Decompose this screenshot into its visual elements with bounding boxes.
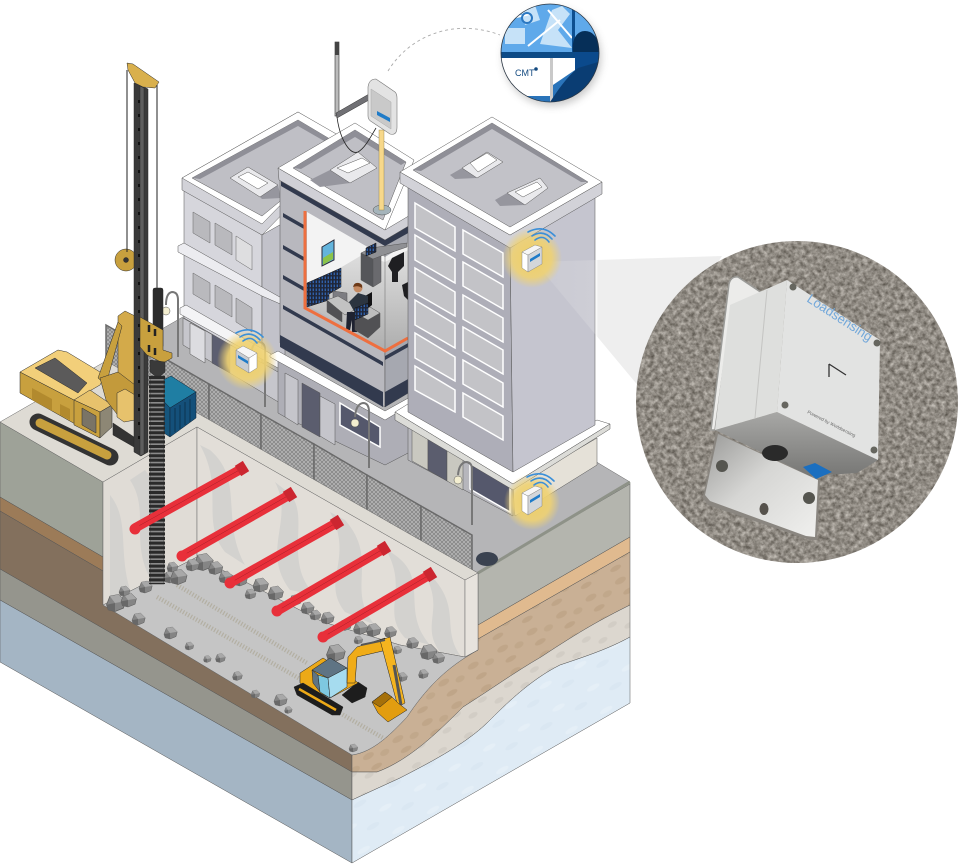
box bottom face <box>715 412 878 476</box>
tower cornice <box>400 172 602 248</box>
carriage slots <box>149 325 155 355</box>
layer: right peach soil <box>478 537 630 639</box>
sensor: tower wall <box>502 228 562 288</box>
screens facing viewer <box>355 303 368 320</box>
left skylight base <box>230 167 278 197</box>
glass corner <box>384 257 386 350</box>
lamp by middle building <box>355 403 369 468</box>
tower front wall <box>408 185 513 472</box>
lower mounting plate rim <box>703 432 820 540</box>
plate hole <box>760 503 768 515</box>
door <box>428 436 447 481</box>
lower mounting plate <box>705 434 818 537</box>
left building roof rim <box>182 112 345 224</box>
picture landscape <box>323 252 333 265</box>
drill motor <box>153 288 163 348</box>
layer: right ice bedrock <box>352 637 630 863</box>
gateway antenna <box>335 42 397 215</box>
cab right glass <box>328 668 347 698</box>
control room screens <box>501 4 596 52</box>
antenna tip <box>335 42 339 55</box>
tower roof <box>413 123 588 227</box>
rig boom strut <box>98 322 122 385</box>
logo glyph on lid <box>829 364 846 377</box>
navy stripes <box>280 178 410 407</box>
wifi signal <box>528 229 555 242</box>
CMT label: CMT <box>515 68 535 78</box>
middle cornice wall <box>278 168 412 240</box>
sensor box <box>522 486 542 515</box>
CMT logo dot <box>534 67 538 71</box>
middle door <box>302 383 320 437</box>
bucket <box>372 692 407 722</box>
lamp globe three <box>454 476 462 484</box>
filing cabinet <box>361 253 373 287</box>
upper windows <box>193 212 252 332</box>
fence panel 7 <box>421 506 472 573</box>
office floor <box>307 250 408 350</box>
floor tracks <box>157 585 383 738</box>
mast holes <box>138 100 140 448</box>
gateway blue stripe <box>377 111 390 122</box>
rig cab side <box>74 400 100 438</box>
strut 3 <box>224 520 341 588</box>
red struts <box>130 466 434 642</box>
Loadsensing label: Loadsensing <box>804 291 875 344</box>
tower skylight one shadow <box>450 168 477 179</box>
left building door <box>212 333 230 373</box>
cylinder <box>394 665 401 705</box>
mast <box>134 83 148 456</box>
container right side <box>170 392 196 437</box>
desk <box>327 300 342 322</box>
middle shop window <box>340 403 380 447</box>
drilling rig <box>20 63 172 584</box>
second chair <box>402 282 408 300</box>
box front face <box>777 280 880 460</box>
white label panel <box>500 58 550 96</box>
fence panel 3 <box>209 384 261 452</box>
track two <box>177 585 307 663</box>
strut 4 <box>272 546 388 616</box>
circle outline <box>501 4 599 102</box>
box lid seam <box>755 290 767 418</box>
plinth <box>395 404 610 484</box>
lamp by rig <box>166 292 178 357</box>
mini excavator <box>294 637 407 722</box>
sensor glow <box>504 474 560 530</box>
middle building <box>270 123 414 465</box>
column two <box>447 447 463 490</box>
concrete background <box>636 241 958 563</box>
wifi signal <box>236 330 263 343</box>
left building ground floor <box>183 318 285 406</box>
middle skylight base <box>330 152 377 183</box>
box side face <box>715 280 787 430</box>
left building <box>178 112 345 406</box>
street lamps <box>162 292 472 525</box>
container corrugation <box>175 399 190 432</box>
navy divider <box>572 10 575 52</box>
antenna arm <box>336 94 369 118</box>
cab left glass <box>318 675 330 698</box>
middle plinth <box>270 351 412 420</box>
mast highlight <box>140 86 144 456</box>
layer: left blue bedrock <box>0 600 352 863</box>
fence <box>106 325 472 573</box>
left building column <box>190 323 205 363</box>
antenna rod <box>335 42 339 116</box>
person torso <box>349 293 368 313</box>
sensor box <box>522 245 542 272</box>
yellow pole <box>379 130 384 210</box>
track one <box>157 597 307 683</box>
ground floor side <box>513 438 597 516</box>
middle ground floor <box>278 352 410 465</box>
layer: left grey-green soil <box>0 422 103 557</box>
powered by label: Powered by Worldsensing <box>807 409 857 438</box>
left building upper ledge <box>178 243 285 306</box>
screw pile shaft <box>150 376 164 584</box>
left building lower ledge <box>180 305 285 368</box>
front desk <box>355 313 380 338</box>
left pit wall <box>103 427 197 605</box>
mast top bracket <box>127 63 159 88</box>
excavator body <box>300 658 358 698</box>
cab roof <box>312 658 347 678</box>
street curb <box>478 482 630 573</box>
layer: left dark brown soil <box>0 511 352 772</box>
ground floor front <box>408 420 513 516</box>
wall right cap <box>465 573 478 657</box>
pole base <box>373 205 391 215</box>
cable <box>337 117 376 152</box>
corner screws <box>782 284 880 454</box>
layer: left tan soil <box>0 497 103 571</box>
fence panel 1 <box>106 325 157 392</box>
middle column <box>285 373 298 425</box>
layer: right grey-green soil <box>478 484 630 625</box>
cabinet screens <box>366 243 376 256</box>
office chair <box>388 252 404 282</box>
middle facade <box>280 178 385 407</box>
person legs <box>346 312 358 332</box>
boom <box>347 638 387 683</box>
light beam to photo <box>535 256 722 388</box>
rig boom block <box>100 372 135 418</box>
rig track outer <box>38 422 110 457</box>
gateway body <box>368 79 397 134</box>
fence panel 2 <box>157 354 209 422</box>
sensor: tower base <box>504 474 560 530</box>
tower skylight two lid <box>515 182 542 197</box>
cable gland <box>762 445 788 461</box>
container top <box>150 376 196 408</box>
middle column two <box>320 396 335 445</box>
screw pile flights <box>149 376 165 584</box>
left slab and wall cap <box>0 361 478 580</box>
left skylight shadow <box>260 185 281 199</box>
rig vents <box>32 388 70 420</box>
cab slate side <box>312 670 320 692</box>
middle skylight shadow <box>310 170 350 187</box>
strut 2 <box>176 492 294 562</box>
tower windows <box>415 203 503 440</box>
layer: left grey rock <box>0 569 352 800</box>
monitoring circle <box>500 0 605 106</box>
lamp by tower <box>458 462 472 525</box>
person chair <box>365 292 372 310</box>
rubble <box>106 554 445 752</box>
fence panel 4 <box>261 414 314 482</box>
sensor box <box>236 346 257 373</box>
white machine drawing <box>512 10 572 46</box>
fence panel 6 <box>367 475 421 544</box>
boom cylinder <box>361 640 385 645</box>
drill bell <box>150 360 165 378</box>
pit walls and slab <box>0 361 478 755</box>
blue lower panel <box>553 70 575 105</box>
rig cab window <box>82 408 96 433</box>
cut-away office <box>305 211 408 351</box>
manhole near corner <box>476 552 498 566</box>
person head <box>354 284 362 292</box>
track three <box>340 713 383 738</box>
lamp globe two <box>351 419 359 427</box>
sensor: left building <box>217 330 277 390</box>
middle side facade <box>385 224 410 407</box>
rig body side <box>20 372 100 438</box>
blue badge <box>803 463 832 479</box>
middle roof rim <box>278 123 414 230</box>
rig body top <box>20 350 105 400</box>
gateway front <box>371 89 391 129</box>
wall swirls <box>110 445 460 655</box>
strut 1 <box>130 466 246 534</box>
blue lower band <box>528 96 550 102</box>
tower skylight one lid <box>470 153 497 172</box>
photo: Loadsensing device <box>636 241 958 563</box>
rig track plate <box>40 423 107 455</box>
operator shoulder <box>550 62 598 102</box>
ground block cross-section <box>0 422 630 863</box>
rear pulley hub <box>124 258 128 262</box>
second panel <box>553 58 575 85</box>
strut 5 <box>318 572 434 642</box>
drill carriage <box>140 317 172 363</box>
upper mounting plate <box>711 277 765 430</box>
cabinet side <box>373 255 381 287</box>
circle shadow <box>503 8 601 106</box>
long desk top <box>361 243 407 259</box>
dashed connection arc <box>388 28 500 71</box>
shipping container <box>150 376 196 437</box>
middle roof parapet <box>293 130 406 169</box>
operator head <box>573 31 600 52</box>
tower skylight one base <box>462 152 503 178</box>
office back wall <box>307 212 408 307</box>
container left side <box>150 387 170 437</box>
column one <box>412 427 428 470</box>
left building roof parapet <box>192 120 345 179</box>
blue right panel <box>575 58 598 70</box>
rear track <box>342 682 367 703</box>
right tower <box>395 117 610 516</box>
bucket inside <box>372 692 392 707</box>
wifi signal <box>527 474 554 487</box>
orange cut line <box>305 211 408 351</box>
manhole near fence <box>228 404 250 416</box>
stick <box>380 637 405 707</box>
tower side wall <box>510 195 595 472</box>
plinth edge <box>395 412 610 490</box>
lamp by left sensor <box>251 342 265 407</box>
sensor glow <box>217 330 277 390</box>
shop windows <box>470 462 510 512</box>
plate screw left <box>716 460 728 472</box>
gear icon <box>522 13 532 23</box>
picture on wall <box>322 240 334 266</box>
street surface <box>106 267 630 573</box>
pit floor <box>103 557 478 755</box>
rig rear track <box>113 423 134 447</box>
back pit wall <box>197 427 465 657</box>
rig cab top <box>74 390 112 412</box>
rig counter block <box>117 389 135 422</box>
plate screw right <box>803 492 815 504</box>
left building roof <box>192 120 345 216</box>
person hair <box>353 283 362 288</box>
fence panel 5 <box>314 444 367 513</box>
rig cab front <box>100 405 112 438</box>
left building upper walls <box>184 190 262 363</box>
left skylight lid <box>238 172 268 189</box>
front track rim <box>299 689 336 710</box>
front desk top <box>355 307 380 320</box>
front track <box>294 683 343 715</box>
tower roof rim <box>400 117 602 235</box>
left building side wall <box>262 222 285 363</box>
cable right <box>156 85 158 290</box>
left building cornice <box>182 112 345 235</box>
layer: right stone band <box>352 605 630 800</box>
rig boom column <box>118 311 135 395</box>
cable left <box>126 70 128 252</box>
desk top <box>327 296 358 315</box>
middle skylight lid <box>337 158 370 173</box>
monitor <box>333 291 347 305</box>
sensor glow <box>502 228 562 288</box>
layer: right cobble soil <box>352 552 630 772</box>
lamp globe one <box>162 307 170 315</box>
screen highlights <box>505 5 572 48</box>
rig engine panel <box>35 358 87 393</box>
tower skylight two base <box>507 178 548 205</box>
rear pulley <box>115 249 137 271</box>
middle roof <box>293 130 406 220</box>
tower skylight two shadow <box>495 193 525 206</box>
server racks <box>307 268 341 307</box>
tower roof parapet <box>413 123 588 182</box>
navy bar <box>501 52 575 58</box>
